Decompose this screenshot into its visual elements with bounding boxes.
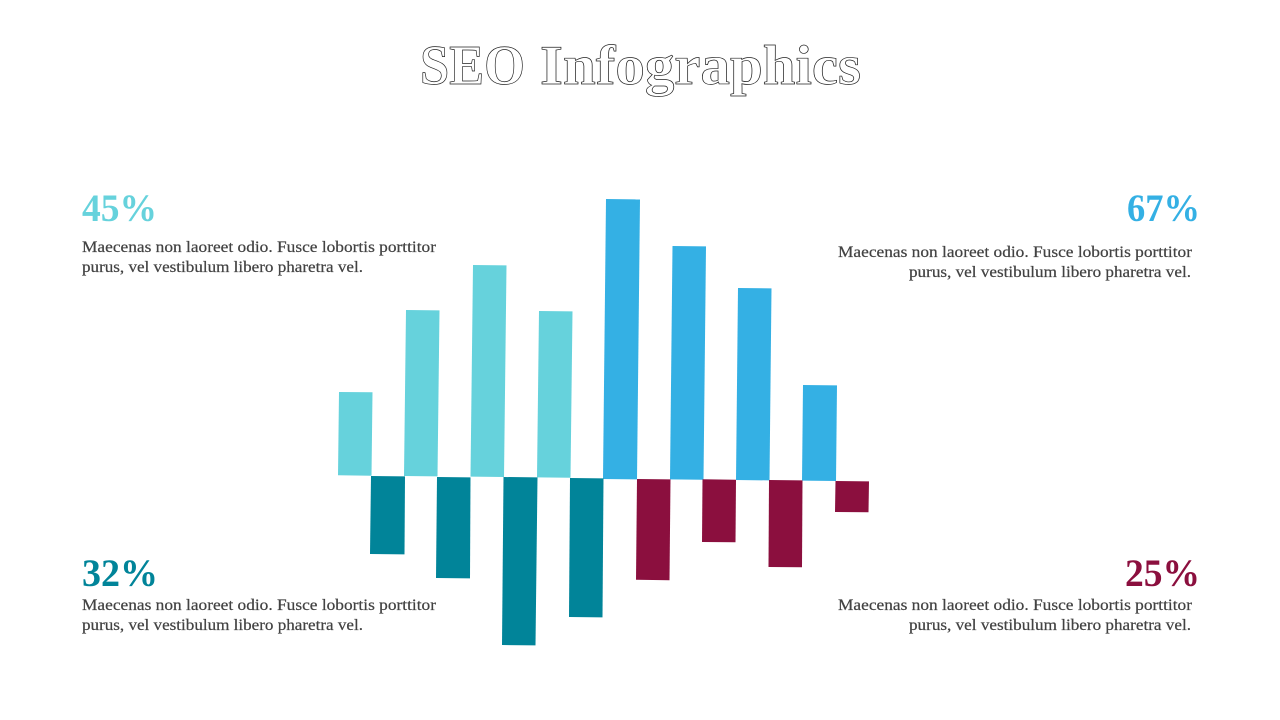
description: bottom-right: Maecenas non laoreet odio. Fusce lobortis porttitor	[838, 597, 1193, 614]
panel: bottom-left stat	[82, 552, 437, 634]
description: top-left: purus, vel vestibulum libero pharetra vel.	[82, 259, 363, 276]
bars: maroon, downward	[636, 479, 869, 580]
description: bottom-left: purus, vel vestibulum libero pharetra vel.	[82, 617, 363, 634]
stat: 45%: 45%	[82, 187, 157, 230]
panel: top-right stat	[838, 187, 1200, 281]
title: SEO	[420, 35, 525, 97]
description: bottom-left	[82, 597, 437, 634]
stat: 32%: 32%	[82, 552, 158, 595]
panel: bottom-right stat	[838, 552, 1200, 634]
description: bottom-left: Maecenas non laoreet odio. Fusce lobortis porttitor	[82, 597, 437, 614]
title	[420, 35, 861, 97]
description: top-right: Maecenas non laoreet odio. Fusce lobortis porttitor	[838, 244, 1193, 261]
stat: 25%: 25%	[1125, 552, 1200, 595]
bar chart	[338, 199, 869, 645]
description: top-right	[838, 244, 1193, 281]
description: bottom-right: purus, vel vestibulum libero pharetra vel.	[909, 617, 1191, 634]
description: top-left: Maecenas non laoreet odio. Fusce lobortis porttitor	[82, 239, 437, 256]
bars: blue, upward	[603, 199, 837, 481]
description: top-right: purus, vel vestibulum libero pharetra vel.	[909, 264, 1191, 281]
stat: 67%: 67%	[1127, 187, 1200, 230]
title: Infographics	[540, 35, 861, 97]
bars: light teal, upward	[338, 265, 572, 478]
description: top-left	[82, 239, 437, 276]
bars: dark teal, downward	[370, 476, 604, 645]
description: bottom-right	[838, 597, 1193, 634]
panel: top-left stat	[82, 187, 437, 276]
